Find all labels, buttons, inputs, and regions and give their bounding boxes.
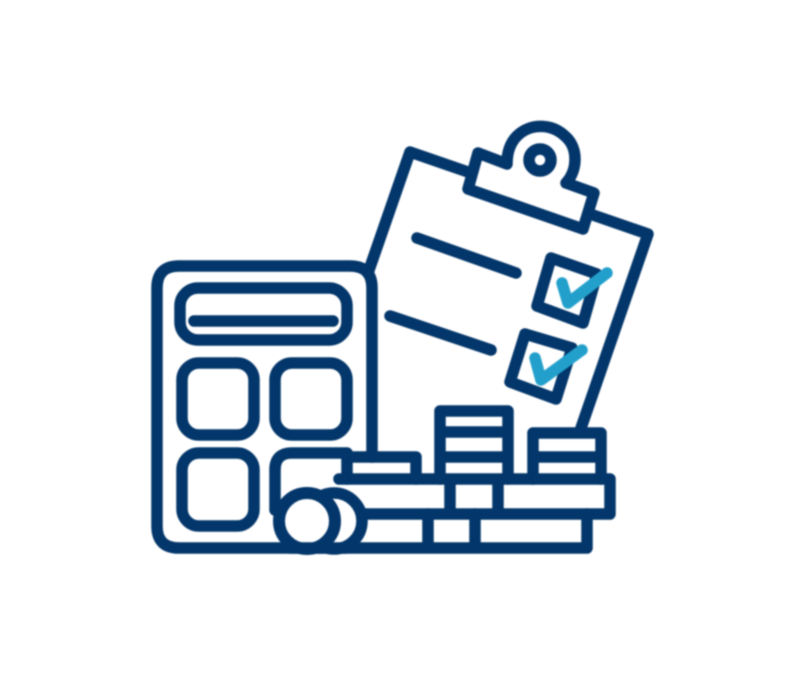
icon: coin stacks: [279, 411, 610, 549]
calculator body: [157, 266, 372, 548]
calculator display: [180, 288, 347, 340]
icon: calculator: [157, 266, 372, 548]
center stack: [440, 411, 508, 479]
coin base line: [290, 542, 345, 554]
checkbox 2: [510, 334, 572, 399]
button 1: [182, 363, 254, 435]
button 4 partially hidden: [275, 453, 347, 510]
middle layer: [339, 479, 610, 514]
check mark 1: [562, 273, 607, 303]
check mark 2: [535, 350, 582, 380]
right stack: [533, 433, 601, 479]
checklist line 2: [390, 316, 491, 350]
front coin: [279, 493, 335, 549]
icon: clipboard: [368, 126, 648, 428]
display line: [194, 315, 333, 327]
left stack: [347, 457, 416, 479]
clip hole: [529, 149, 551, 171]
checklist line 1: [417, 238, 516, 273]
clipboard clip: [468, 126, 594, 229]
bottom layer: [300, 514, 587, 548]
checkbox 1: [537, 258, 597, 323]
clipboard board outline: [368, 152, 648, 428]
button 2: [275, 363, 347, 435]
back coin: [306, 493, 362, 549]
button 3: [182, 453, 254, 526]
